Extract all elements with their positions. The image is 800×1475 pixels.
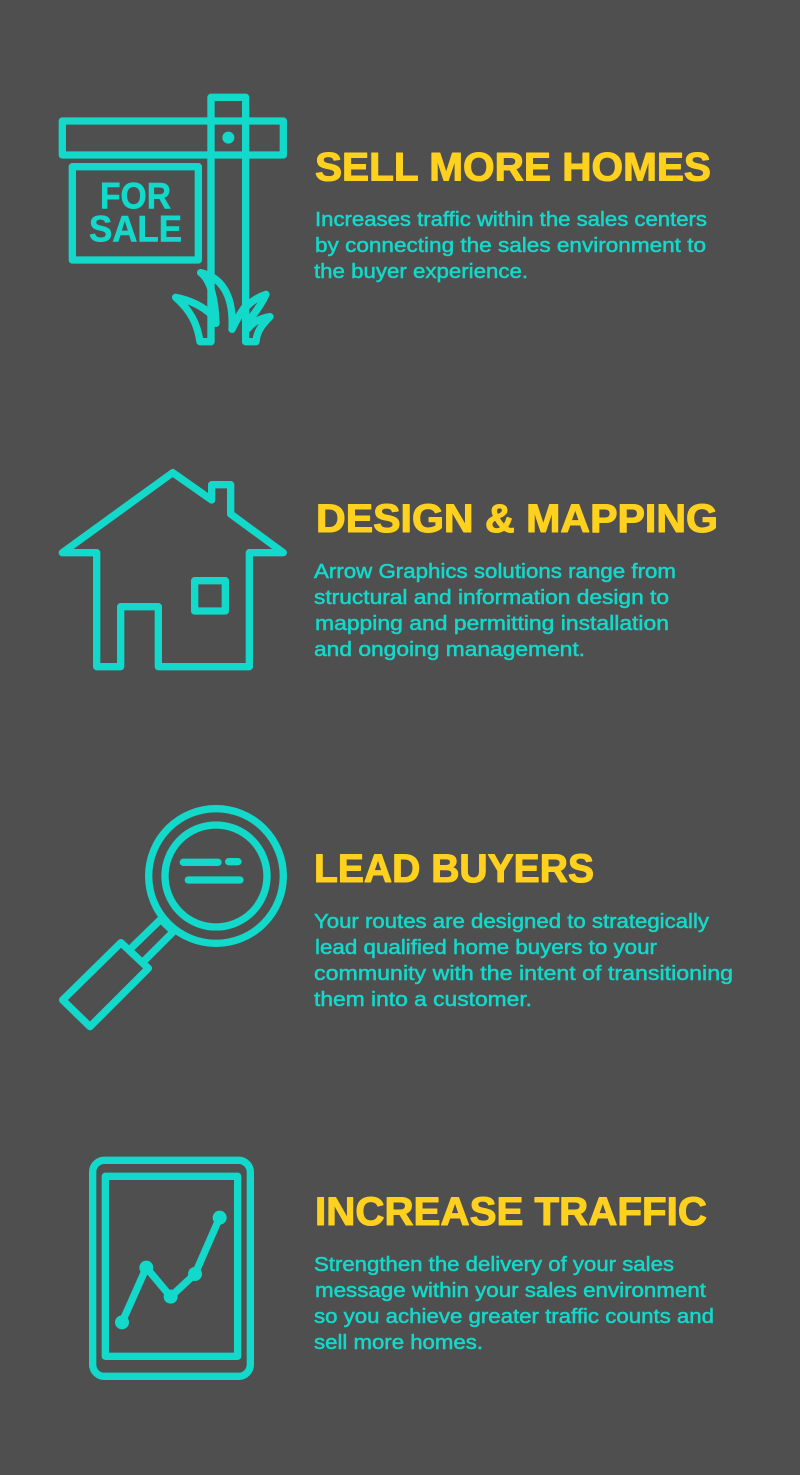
heading: sell more homes: SELL MORE HOMES: [315, 146, 711, 190]
text block: design and mapping description: structural and information design to: [314, 587, 669, 609]
sign text: for sale: SALE: [89, 208, 182, 250]
text block: sell more homes description: Increases traffic within the sales centers: [315, 209, 707, 231]
text block: increase traffic description: [314, 1254, 714, 1354]
text block: design and mapping description: mapping and permitting installation: [315, 613, 669, 635]
icon: house: [62, 473, 283, 667]
icon: magnifying glass: [63, 809, 283, 1027]
text block: design and mapping description: [314, 561, 676, 661]
text block: increase traffic description: so you achieve greater traffic counts and: [314, 1306, 714, 1328]
sign post and crossbar: [62, 97, 283, 342]
text block: sell more homes description: [314, 209, 707, 283]
text block: increase traffic description: message within your sales environment: [315, 1280, 706, 1302]
text block: increase traffic description: sell more homes.: [314, 1332, 483, 1354]
section: sell more homes: [62, 97, 711, 342]
icon: for sale sign: [62, 97, 283, 342]
text block: sell more homes description: by connecting the sales environment to: [315, 235, 706, 257]
sign text: for sale: FOR: [100, 176, 171, 216]
sign text: for sale: [89, 176, 182, 250]
text block: sell more homes description: the buyer experience.: [314, 261, 528, 283]
heading: increase traffic: INCREASE TRAFFIC: [315, 1190, 707, 1234]
section: lead buyers: [63, 809, 733, 1027]
text block: lead buyers description: them into a customer.: [314, 989, 532, 1011]
text block: design and mapping description: and ongoing management.: [314, 639, 585, 661]
icon: tablet with line chart: [93, 1160, 250, 1376]
heading: design and mapping: DESIGN & MAPPING: [316, 497, 718, 541]
section: design and mapping: [62, 473, 718, 667]
section: increase traffic: [93, 1160, 714, 1376]
text block: lead buyers description: [314, 911, 733, 1011]
text block: lead buyers description: lead qualified home buyers to your: [315, 937, 657, 959]
text block: increase traffic description: Strengthen the delivery of your sales: [314, 1254, 674, 1276]
text block: design and mapping description: Arrow Graphics solutions range from: [314, 561, 676, 583]
text block: lead buyers description: Your routes are designed to strategically: [314, 911, 709, 933]
text block: lead buyers description: community with the intent of transitioning: [314, 963, 733, 985]
heading: lead buyers: LEAD BUYERS: [314, 847, 594, 891]
